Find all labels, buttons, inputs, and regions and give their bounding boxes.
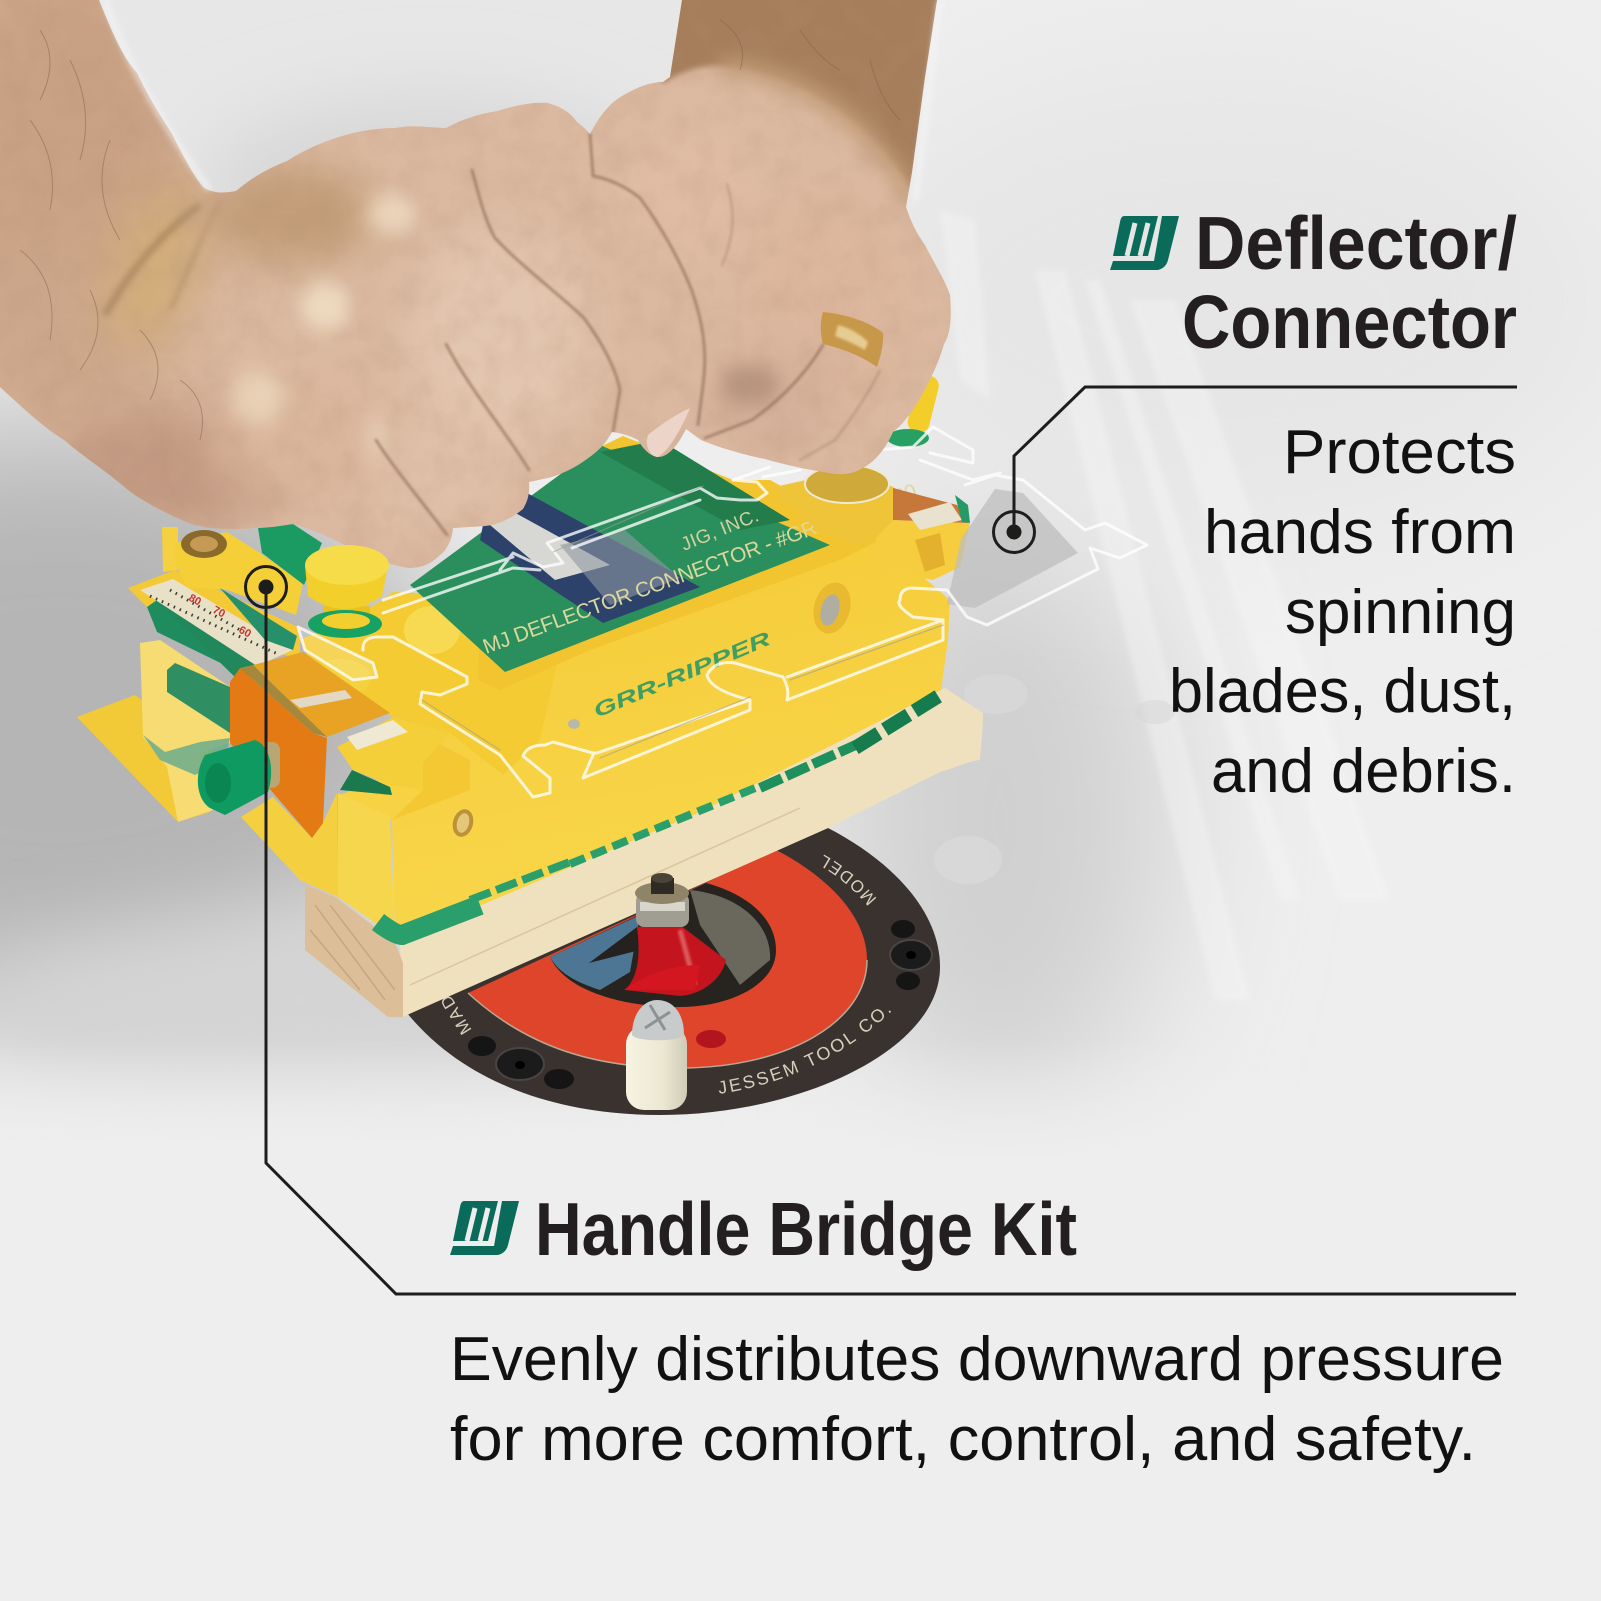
back rail	[877, 427, 1000, 480]
side lettering: GRR-RIPPER	[590, 628, 775, 723]
jig: top yellow rim and green top: JIG, INC.	[678, 505, 762, 556]
lower block	[77, 695, 240, 822]
text block: handle bridge description: for more comfort, control, and safety.	[450, 1405, 1476, 1474]
plate lettering	[435, 854, 891, 1094]
plate opening	[550, 883, 776, 1007]
heading: Handle Bridge Kit: Handle Bridge Kit	[535, 1187, 1077, 1271]
callout: deflector connector leader	[994, 387, 1517, 552]
support block	[162, 527, 178, 572]
clear acrylic deflector	[298, 427, 1147, 797]
text block: deflector description: spinning	[1285, 578, 1516, 647]
text block: deflector description	[1169, 418, 1516, 806]
text block: deflector description: and debris.	[1211, 737, 1516, 806]
red tick numbers: 70	[211, 604, 227, 620]
sticker	[480, 493, 700, 623]
ruler rail	[147, 600, 240, 670]
jig: handle bridge end	[77, 524, 450, 897]
hands	[0, 0, 1000, 600]
cap with brass insert	[175, 532, 303, 615]
front edge	[363, 637, 750, 797]
arm hair	[20, 20, 900, 440]
left tab	[298, 627, 377, 680]
left forearm tone	[0, 0, 202, 272]
arm hair fringe	[105, 0, 940, 200]
wrist crease tone	[110, 190, 210, 342]
plate lettering: MAD	[435, 990, 475, 1038]
router plate	[408, 828, 940, 1115]
bottom pin	[626, 1000, 687, 1110]
text block: deflector description: Protects	[1283, 418, 1516, 487]
embossed lettering: MJ DEFLECTOR CONNECTOR - #GRPDC - 2020	[480, 480, 920, 659]
green handle	[258, 524, 322, 585]
green slider	[167, 663, 230, 733]
icon: MJ logo bottom	[450, 1201, 519, 1255]
green clamp knob	[198, 740, 280, 815]
heading: Deflector/Connector	[1182, 201, 1517, 364]
thumbnail	[647, 408, 690, 458]
wedding ring	[821, 312, 883, 367]
plate lettering: MODEL #	[823, 854, 876, 906]
text block: handle bridge description	[450, 1325, 1504, 1474]
right hand tone	[620, 120, 760, 260]
right forearm tone	[660, 0, 937, 191]
skin mottling	[404, 152, 785, 526]
router bit	[589, 873, 726, 996]
back of hand tone	[205, 165, 375, 265]
text block: deflector description: hands from	[1204, 498, 1516, 567]
finger creases	[376, 134, 880, 535]
table streaks	[940, 210, 1390, 1000]
red tick numbers	[187, 592, 253, 640]
wood board	[305, 688, 983, 1017]
jig: main yellow body	[338, 540, 950, 942]
text block: handle bridge description: Evenly distributes downward pressure	[450, 1325, 1504, 1394]
right ruler block	[337, 717, 450, 790]
orange fence	[230, 668, 327, 838]
text block: deflector description: blades, dust,	[1169, 657, 1516, 726]
red tick numbers: 80	[187, 592, 203, 608]
right clear panel	[947, 489, 1078, 608]
yellow base under fence	[241, 793, 338, 897]
green edge	[378, 694, 942, 935]
plate lettering: JESSEM TOOL CO.	[718, 1009, 891, 1094]
callout: handle bridge leader	[246, 566, 1516, 1294]
jig: large yellow post and right block	[770, 373, 970, 580]
jig: top yellow rim and green top	[410, 436, 920, 690]
heading: Deflector/Connector: Deflector/	[1195, 201, 1517, 285]
red tick numbers: 60	[237, 624, 253, 640]
plate screws	[468, 920, 932, 1089]
heading: Deflector/Connector: Connector	[1182, 280, 1517, 364]
icon: MJ logo top	[1110, 216, 1179, 270]
jig: U-shaped handle body	[300, 592, 560, 775]
red insert ring	[468, 850, 867, 1068]
knuckle highlights	[366, 194, 418, 234]
middle rail	[383, 467, 800, 613]
yellow knob with green ring	[305, 545, 389, 638]
